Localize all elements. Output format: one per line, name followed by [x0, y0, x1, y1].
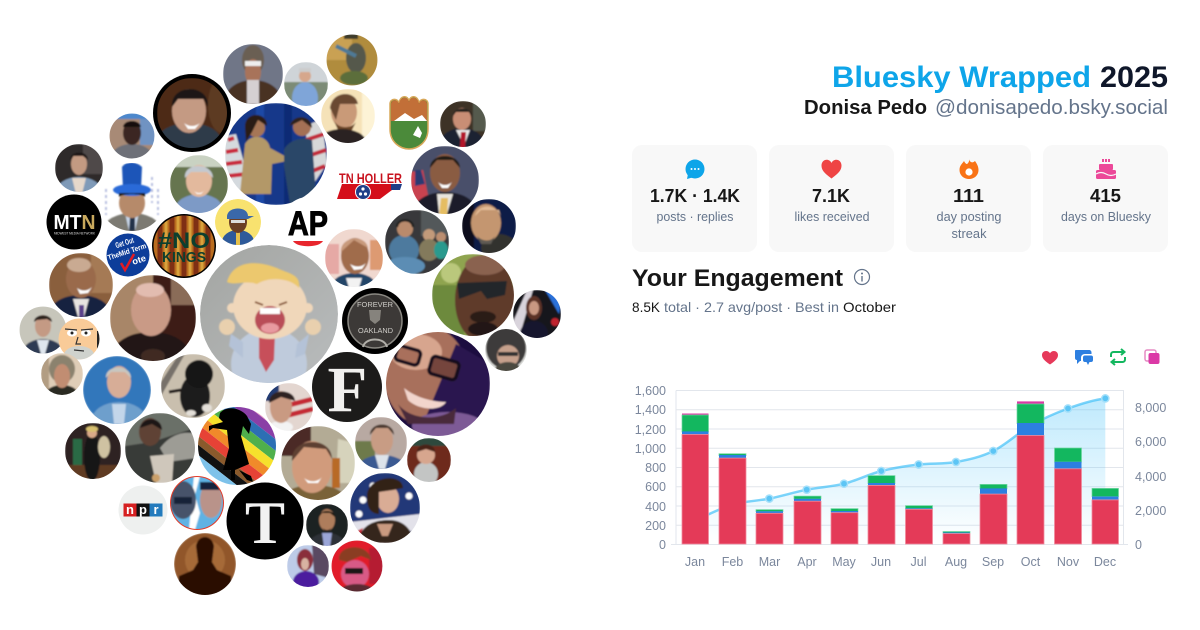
avatar: TN Holler logo — [336, 146, 404, 214]
icon: quote squares — [1145, 350, 1160, 364]
icon: like heart — [1042, 351, 1058, 364]
avatar: NPR logo: r — [153, 502, 159, 517]
cumulative area — [695, 398, 1105, 544]
stacked bars: replies — [682, 423, 1118, 534]
avatar: woman with red hair in purple — [287, 545, 329, 593]
avatar: Get Out The Mid Term Vote — [104, 233, 151, 276]
avatar: woman on TV set — [513, 290, 561, 338]
month labels: Mar — [759, 555, 780, 569]
avatar: rainbow flag with silhouette — [198, 407, 276, 485]
avatar: George Takei — [170, 155, 228, 213]
left axis labels: 1,200 — [635, 423, 666, 437]
avatar: No Kings logo: KINGS — [162, 249, 206, 266]
avatar: man in blue shirt — [284, 62, 328, 106]
avatar: John Fetterman — [462, 199, 516, 253]
avatar: Forbes F logo: F — [328, 354, 367, 426]
right axis labels: 2,000 — [1135, 504, 1166, 518]
left axis labels: 400 — [645, 500, 666, 514]
avatar: bald man with microphone — [110, 275, 196, 361]
display name: Donisa Pedo — [804, 97, 927, 119]
avatar: No Kings logo: #NO — [158, 228, 210, 253]
label: streak — [952, 227, 987, 241]
card: days on Bluesky — [1043, 145, 1168, 252]
avatar: Forever Oakland: FOREVER — [357, 300, 394, 309]
avatar: Get Out The Mid Term Vote: ote — [131, 253, 147, 267]
avatar: Cory Booker smiling — [325, 229, 383, 287]
right axis labels: 4,000 — [1135, 470, 1166, 484]
month labels: Oct — [1021, 555, 1041, 569]
left axis labels: 1,400 — [635, 403, 666, 417]
value: 111 — [953, 186, 984, 206]
avatar: Forever Oakland: OAKLAND — [358, 326, 394, 335]
left axis labels: 800 — [645, 461, 666, 475]
avatar: Trump cartoon drawing — [200, 245, 338, 383]
month labels: Jan — [685, 555, 705, 569]
month labels: Sep — [982, 555, 1004, 569]
avatar: man in suit with red tie — [440, 101, 486, 147]
avatar: Forever Oakland — [342, 288, 408, 354]
month labels: Dec — [1094, 555, 1116, 569]
avatar: woman with flag background — [350, 473, 420, 543]
avatar: cartoon grumpy man — [58, 318, 100, 360]
avatar: bearded man with glasses — [321, 89, 375, 143]
avatar: MTN logo: N — [82, 212, 96, 234]
left axis labels — [635, 384, 666, 552]
engagement summary: October — [843, 299, 896, 315]
avatar: NPR logo — [118, 486, 168, 534]
value: 415 — [1090, 186, 1121, 206]
avatar: fantasy miniature figure — [326, 34, 378, 86]
avatar: MTN logo — [46, 194, 102, 250]
avatar: AP logo — [282, 197, 334, 249]
icon: cake — [1096, 159, 1116, 179]
left axis labels: 1,000 — [635, 442, 666, 456]
avatar: cartoon man on yellow — [215, 199, 261, 245]
avatar: woman holding dog — [65, 423, 121, 481]
engagement summary: 8.5K — [632, 299, 661, 315]
avatar: Forbes F logo — [312, 352, 382, 426]
avatar: Alt USFS badge logo — [381, 95, 437, 151]
avatar: woman with red hair and sunglasses — [331, 540, 383, 600]
avatar: man on blue background — [83, 356, 151, 424]
avatar: Mark Cuban — [281, 426, 355, 500]
avatar: young man with flag — [265, 383, 313, 433]
avatar: person in cat hood — [485, 329, 527, 371]
engagement summary — [632, 299, 896, 315]
icon: flame — [960, 159, 978, 179]
chart grid — [671, 390, 1128, 544]
chart: engagement by month — [635, 384, 1166, 569]
avatar: two men with sunglasses — [170, 476, 224, 530]
right axis labels: 8,000 — [1135, 401, 1166, 415]
stacked bars: quotes — [682, 401, 1044, 416]
month labels: Jul — [911, 555, 926, 569]
left axis labels: 1,600 — [635, 384, 666, 398]
avatar bubble cluster — [19, 34, 561, 600]
avatar: No Kings logo — [152, 214, 216, 278]
heading year: 2025 — [1100, 61, 1168, 94]
right axis labels: 6,000 — [1135, 435, 1166, 449]
card: likes received — [769, 145, 894, 252]
month labels: Feb — [722, 555, 743, 569]
left axis labels: 600 — [645, 480, 666, 494]
month labels: Jun — [871, 555, 891, 569]
avatar: Hakeem Jeffries — [411, 146, 479, 214]
avatar: man with curly grey hair — [41, 353, 83, 395]
avatar: man in blue party hat — [104, 163, 160, 231]
avatar: NPR logo: p — [139, 502, 147, 517]
avatar: AP logo: AP — [288, 205, 328, 243]
avatar: man with grey jacket — [355, 417, 407, 469]
icon: repost arrows — [1111, 349, 1125, 365]
icon: info — [854, 270, 870, 284]
avatar: New York Times T logo: T — [245, 490, 285, 556]
heading: Your Engagement: Your Engagement — [632, 265, 843, 292]
avatar: silhouette placeholder — [174, 533, 236, 598]
avatar: man in blue jacket, dark background — [55, 144, 103, 192]
avatar: Get Out The Mid Term Vote: Get Out — [114, 236, 135, 250]
label: posts · replies — [656, 210, 734, 224]
avatar: Cory Booker in suit — [49, 253, 113, 317]
avatar: men in helicopter — [385, 210, 449, 275]
label: day posting — [936, 210, 1002, 224]
stacked bars: likes — [682, 434, 1118, 544]
month labels: Nov — [1057, 555, 1080, 569]
avatar: MTN logo: MIDWEST MEDIA NETWORK — [54, 232, 96, 236]
card: posts and replies — [632, 145, 757, 252]
avatar: New York Times T logo — [226, 482, 304, 560]
engagement summary: total · 2.7 avg/post · Best in — [664, 299, 839, 315]
month labels: Apr — [797, 555, 817, 569]
line markers — [766, 395, 1109, 502]
label: days on Bluesky — [1061, 210, 1152, 224]
right axis labels: 0 — [1135, 538, 1142, 552]
avatar: man lying on couch — [125, 413, 196, 483]
avatar: toddler — [407, 438, 451, 486]
avatar: Harris and man shaking hands — [225, 103, 327, 205]
avatar: man in suit with glasses — [20, 306, 66, 354]
cumulative line — [695, 398, 1105, 521]
label — [936, 210, 1002, 241]
avatar: black dog — [161, 354, 225, 418]
avatar: smiling man, black ring — [153, 74, 231, 152]
left axis labels: 0 — [659, 538, 666, 552]
avatar: man in sunglasses with leaves — [432, 254, 515, 344]
icon: heart — [822, 160, 842, 178]
avatar: NPR logo: n — [126, 502, 134, 517]
month labels — [685, 555, 1116, 569]
stacked bars: reposts — [682, 404, 1118, 533]
heading: Bluesky Wrapped: Bluesky Wrapped — [832, 61, 1091, 94]
month labels: May — [832, 555, 857, 569]
avatar: man with hoodie — [110, 114, 154, 158]
avatar: Get Out The Mid Term Vote: TheMid Term — [107, 241, 148, 262]
value: 7.1K — [812, 186, 850, 206]
icon: reply bubbles — [1075, 350, 1093, 365]
avatar: smiling man with glasses, purple tint — [386, 332, 490, 436]
label: likes received — [794, 210, 870, 224]
avatar: man with goggles hat — [223, 44, 283, 104]
avatar: TN Holler logo: TN HOLLER — [339, 170, 402, 186]
card: day posting streak — [906, 145, 1031, 252]
avatar: MTN logo: MT — [54, 212, 82, 234]
avatar: man in dark suit — [306, 504, 348, 557]
left axis labels: 200 — [645, 519, 666, 533]
value: 1.7K · 1.4K — [650, 186, 740, 206]
handle: @donisapedo.bsky.social — [935, 97, 1168, 119]
right axis labels — [1135, 401, 1166, 552]
icon: speech bubble — [686, 160, 704, 179]
legend icons — [1042, 349, 1160, 365]
month labels: Aug — [945, 555, 967, 569]
